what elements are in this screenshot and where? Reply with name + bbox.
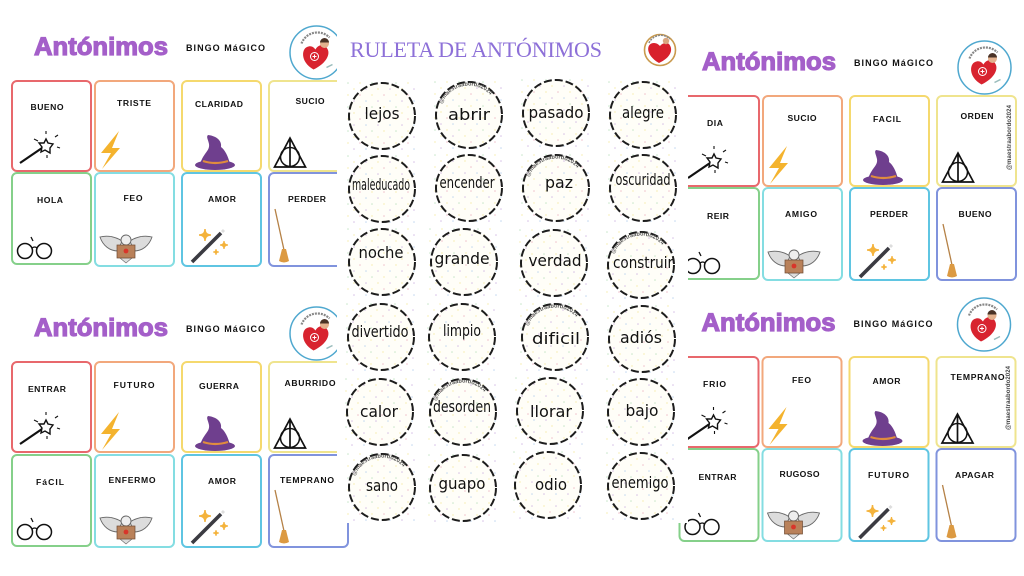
cell: bueno: BUENO [958,209,992,219]
cell: temprano [936,357,1016,447]
cell: entrar [12,362,91,452]
token: sano: sano [366,476,398,495]
token: verdad: verdad [528,251,582,270]
cell: rugoso [762,449,842,541]
token: alegre: alegre [622,103,664,122]
cell: temprano: TEMPRANO [280,475,334,485]
cell: entrar [680,449,758,541]
token: desorden [428,378,497,446]
cell: guerra: GUERRA [199,381,239,391]
token: abrir: abrir [448,105,490,124]
token: calor [343,375,417,449]
token: grande [427,225,501,299]
token: construir: construir [613,253,673,272]
token: construir [606,231,675,299]
title: Antónimos [34,314,168,342]
cell: orden [937,96,1016,186]
cell: guerra [182,362,261,452]
logo [290,307,343,360]
cell: apagar [936,449,1016,541]
logo small [644,34,676,66]
cell: triste [95,81,174,171]
cell: feo [762,357,842,447]
token: oscuridad: oscuridad [616,170,670,189]
token: noche: noche [358,243,404,262]
cell: feo: FEO [792,375,811,385]
cell: futuro [95,362,174,452]
token: bajo [604,375,678,449]
cell: facil: FáCIL [36,477,64,487]
token: adios: adiós [620,328,662,347]
cell: frio [680,357,758,447]
panel: roulette of antonyms [337,34,688,523]
cell: apagar: APAGAR [955,470,995,480]
panel: bingo card bottom left [12,307,348,547]
cell: feo: FEO [124,193,143,203]
cell: futuro [850,449,928,541]
watermark bottom right: @maestraabordo2024 [1006,365,1012,430]
cell: dia [680,96,759,186]
token: oscuridad [606,151,680,225]
cell: futuro: FUTURO [868,470,909,480]
subtitle: BINGO MáGICO [854,319,932,329]
token: abrir [434,81,503,149]
token: limpio: limpio [443,321,481,340]
cell: hola [12,173,91,264]
token: guapo: guapo [438,474,486,493]
cell: entrar: ENTRAR [698,472,737,482]
token: dificil [520,303,589,371]
cell: perder [850,188,929,280]
token: dificil: dificil [532,329,580,348]
heading: RULETA DE ANTÓNIMOS [350,37,602,62]
cell: entrar: ENTRAR [28,384,67,394]
cell: sucio: SUCIO [296,96,325,106]
token: construir: @maestraabordo2024 [611,232,664,254]
token: llorar [513,374,587,448]
cell: reir [680,188,759,279]
panel: bingo card bottom right [680,298,1016,541]
token: encender: encender [440,173,495,192]
cell: temprano: TEMPRANO [950,372,1005,382]
cell: sucio [763,96,842,186]
subtitle: BINGO MáGICO [186,43,265,53]
logo [958,298,1010,351]
panel: bingo card top left [12,26,348,266]
token: dificil: @maestraabordo2024 [525,304,578,326]
token: paz: paz [545,173,573,192]
cell: facil [850,96,929,186]
token: odio [511,448,585,522]
token: grande: grande [434,249,490,268]
token: bajo: bajo [626,401,658,420]
cell: claridad [182,81,261,171]
token: enemigo [604,449,678,523]
token: adios [605,302,679,376]
token: sano: @maestraabordo2024 [352,454,406,476]
panel: bingo card top right [680,41,1016,280]
cell: amor: AMOR [208,194,237,204]
token: divertido [344,300,418,374]
cell: amor [182,173,261,266]
token: verdad [517,226,591,300]
cell: hola: HOLA [37,195,63,205]
subtitle: BINGO MáGICO [186,324,265,334]
cell: amor: AMOR [208,476,237,486]
cell: feo [95,173,174,266]
token: maleducado [345,152,419,226]
subtitle: BINGO MáGICO [854,58,933,68]
cell: amor [182,455,261,547]
token: abrir: @maestraabordo2024 [439,82,492,104]
cell: perder: PERDER [288,194,327,204]
cell: perder [269,173,348,266]
token: enemigo: enemigo [612,473,668,492]
cell: amor [850,357,928,447]
cell: amor: AMOR [872,376,901,386]
token: lejos: lejos [364,104,400,123]
token: limpio [425,300,499,374]
cell: amigo: AMIGO [785,209,817,219]
token: paz: @maestraabordo2024 [526,154,580,176]
token: desorden: desorden [433,397,491,416]
token: llorar: llorar [530,402,572,421]
cell: bueno: BUENO [30,102,64,112]
cell: sucio [269,81,348,171]
title: Antónimos [702,309,836,337]
cell: bueno [937,188,1016,280]
watermark top right: @maestraabordo2024 [1007,104,1013,170]
logo [958,41,1011,94]
cell: reir: REIR [707,211,730,221]
token: odio: odio [535,475,567,494]
cell: facil [12,455,91,546]
token: guapo [426,451,500,525]
token: pasado: pasado [528,103,584,122]
title: Antónimos [34,33,168,61]
cell: enfermo: ENFERMO [108,475,156,485]
token: maleducado: maleducado [352,175,410,194]
token: calor: calor [360,402,398,421]
token: paz [521,154,590,222]
cell: enfermo [95,455,174,547]
token: divertido: divertido [352,322,408,341]
cell: futuro: FUTURO [114,380,155,390]
token: lejos [345,79,419,153]
token: sano [347,453,416,521]
cell: dia: DIA [707,118,723,128]
cell: amigo [763,188,842,280]
cell: claridad: CLARIDAD [195,99,243,109]
cell: facil: FACIL [873,114,901,124]
cell: orden: ORDEN [960,111,994,121]
token: encender [432,151,506,225]
cell: bueno [12,81,91,171]
cell: sucio: SUCIO [788,113,817,123]
cell: frio: FRIO [703,379,726,389]
token: desorden: @maestraabordo2024 [433,378,486,400]
title: Antónimos [702,48,836,76]
cell: triste: TRISTE [117,98,151,108]
cell: aburrido [269,362,348,452]
cell: rugoso: RUGOSO [780,469,820,479]
cell: temprano [269,455,348,547]
token: alegre [606,78,680,152]
cell: aburrido: ABURRIDO [284,378,336,388]
token: pasado [519,76,593,150]
cell: perder: PERDER [870,209,909,219]
logo [290,26,343,79]
token: noche [345,225,419,299]
